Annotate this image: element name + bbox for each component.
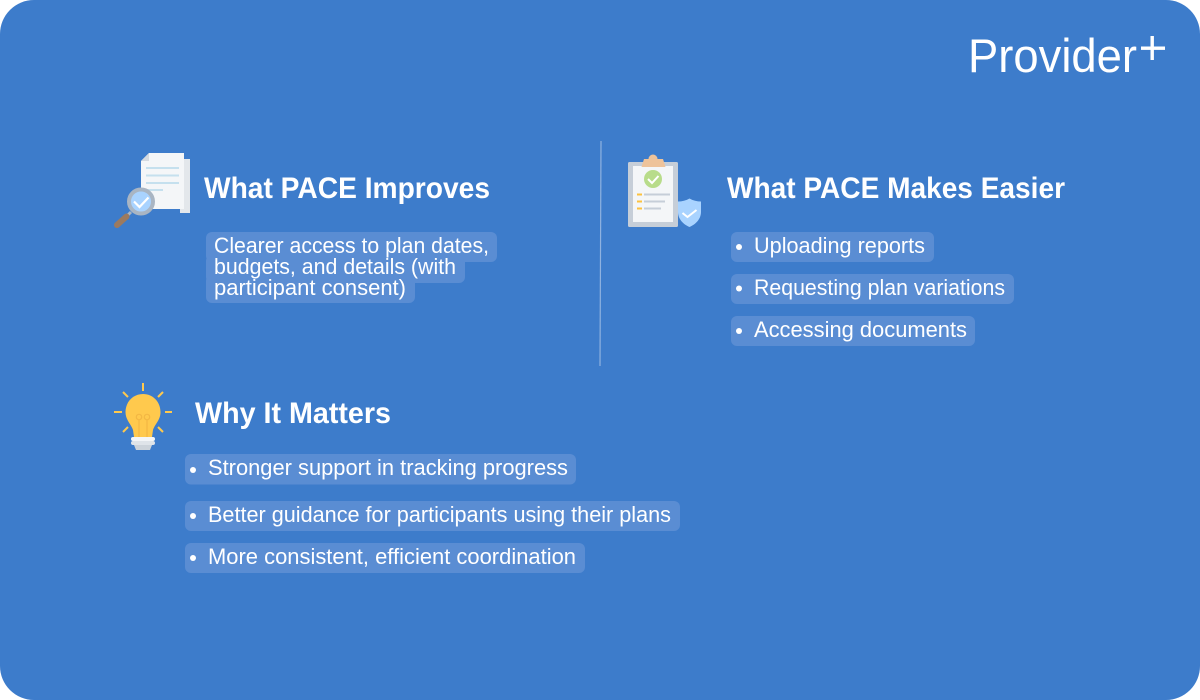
- text block: highlighted description: participant consent): [214, 275, 406, 300]
- list item: Requesting plan variations: Requesting plan variations: [754, 275, 1005, 300]
- list item: Uploading reports: Uploading reports: [754, 233, 925, 258]
- heading: What PACE Improves: [204, 172, 490, 205]
- vertical divider: [600, 141, 601, 366]
- text block: highlighted description: [206, 232, 497, 303]
- logo: Provider+: Provider: [968, 29, 1137, 82]
- icon: light bulb: [114, 383, 172, 450]
- panel: What PACE Makes Easier: [628, 154, 1065, 346]
- panel: What PACE Improves: [117, 153, 497, 303]
- text block: highlighted description: budgets, and details (with: [214, 254, 456, 279]
- list item: Better guidance for participants using their plans: Better guidance for participants using their plans: [208, 502, 671, 527]
- icon: clipboard with shield: [628, 154, 701, 227]
- text block: highlighted description: Clearer access to plan dates,: [214, 233, 489, 258]
- heading: What PACE Makes Easier: [727, 172, 1065, 205]
- panel: Why It Matters: [114, 383, 680, 573]
- heading: Why It Matters: [195, 397, 391, 430]
- icon: document with magnifying glass: [117, 153, 190, 225]
- list item: Accessing documents: Accessing documents: [754, 317, 967, 342]
- list item: Stronger support in tracking progress: Stronger support in tracking progress: [208, 455, 568, 480]
- list item: More consistent, efficient coordination: More consistent, efficient coordination: [208, 544, 576, 569]
